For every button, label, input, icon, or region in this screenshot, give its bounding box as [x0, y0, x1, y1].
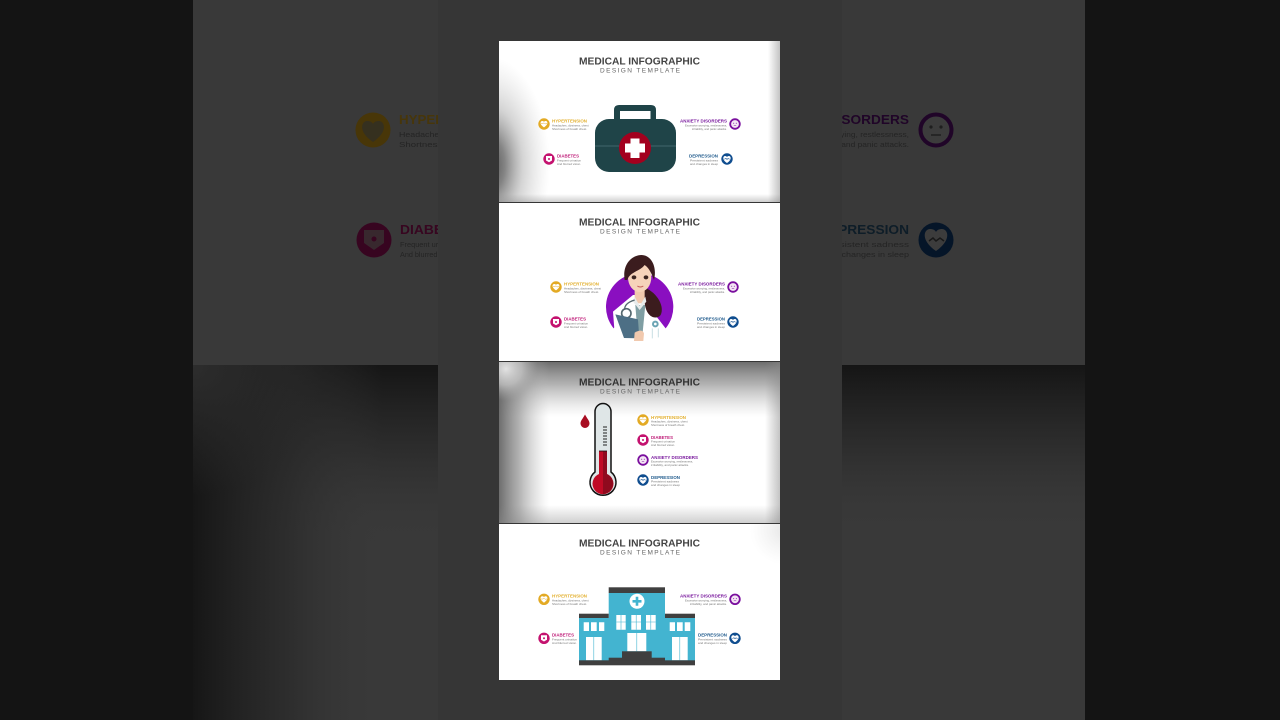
item: depression: and changes in sleep: [690, 162, 718, 166]
heading: [579, 56, 700, 74]
item: diabetes: [543, 153, 581, 166]
item: depression: [698, 633, 741, 645]
background ghost item: anxiety disorders: [765, 112, 952, 149]
item: hypertension: Headaches, dizziness, chest: [552, 123, 589, 127]
heading: [579, 538, 700, 556]
background ghost item: hypertension: [356, 112, 512, 149]
background ghost item: depression: DEPRESSION: [819, 222, 909, 237]
item: depression: and changes in sleep: [697, 325, 725, 329]
item: diabetes: Frequent urination: [564, 321, 588, 325]
item: hypertension: [637, 414, 688, 427]
item: hypertension: HYPERTENSION: [552, 118, 587, 123]
item: hypertension: Headaches, dizziness, chest: [564, 286, 601, 290]
item: hypertension: [550, 281, 601, 294]
item: anxiety disorders: Excessive worrying, restlessness,: [685, 599, 727, 603]
item: depression: DEPRESSION: [697, 316, 725, 321]
item: hypertension: Headaches, dizziness, chest: [651, 419, 688, 423]
item: hypertension: Shortness of breath chest.: [552, 602, 587, 606]
item: depression: DEPRESSION: [689, 153, 718, 158]
item: depression: Persistent sadness: [690, 158, 719, 162]
background ghost item: diabetes: And blurred vision.: [400, 250, 460, 259]
icon: thermometer: [590, 404, 616, 495]
item: depression: [637, 474, 680, 487]
item: anxiety disorders: [680, 594, 741, 606]
item: depression: DEPRESSION: [698, 633, 727, 638]
heading: DESIGN TEMPLATE: [600, 228, 681, 236]
item: anxiety disorders: ANXIETY DISORDERS: [678, 281, 725, 286]
heading: DESIGN TEMPLATE: [600, 550, 681, 556]
item: anxiety disorders: irritability, and panic attacks.: [651, 463, 689, 467]
item: hypertension: HYPERTENSION: [651, 415, 686, 420]
item: depression: and changes in sleep: [698, 641, 727, 645]
heading: MEDICAL INFOGRAPHIC: [579, 538, 700, 550]
background ghost item: anxiety disorders: irritability, and panic attacks.: [804, 140, 909, 149]
background ghost item: diabetes: [356, 222, 470, 259]
item: diabetes: [550, 316, 588, 329]
item: diabetes: DIABETES: [557, 153, 579, 158]
heading: MEDICAL INFOGRAPHIC: [579, 376, 700, 388]
background ghost item: diabetes: DIABETES: [400, 222, 470, 237]
background ghost item: depression: Persistent sadness: [824, 240, 909, 249]
item: diabetes: DIABETES: [564, 316, 586, 321]
heading: [579, 216, 700, 236]
item: anxiety disorders: irritability, and panic attacks.: [690, 290, 725, 294]
heading: MEDICAL INFOGRAPHIC: [579, 216, 700, 228]
item: diabetes: And blurred vision.: [651, 443, 675, 447]
background ghost item: hypertension: HYPERTENSION: [399, 112, 504, 127]
heading: DESIGN TEMPLATE: [600, 388, 681, 396]
heading: MEDICAL INFOGRAPHIC: [579, 56, 700, 68]
item: hypertension: Shortness of breath chest.: [564, 290, 599, 294]
background ghost item: anxiety disorders: ANXIETY DISORDERS: [765, 112, 909, 127]
item: anxiety disorders: ANXIETY DISORDERS: [680, 594, 727, 599]
item: diabetes: [637, 434, 675, 447]
item: diabetes: Frequent urination: [557, 158, 581, 162]
panel: doctor slide: [499, 203, 780, 361]
heading: DESIGN TEMPLATE: [600, 68, 681, 74]
item: anxiety disorders: Excessive worrying, restlessness,: [651, 459, 693, 463]
background ghost item: anxiety disorders: Excessive worrying, restlessness,: [784, 130, 909, 139]
item: depression: Persistent sadness: [698, 638, 728, 642]
item: depression: and changes in sleep: [651, 483, 680, 487]
illustration: hospital: [579, 587, 695, 665]
item: hypertension: Shortness of breath chest.: [552, 127, 587, 131]
icon: blood drop: [580, 414, 590, 428]
item: anxiety disorders: ANXIETY DISORDERS: [680, 118, 727, 123]
item: diabetes: And blurred vision.: [557, 162, 581, 166]
item: diabetes: DIABETES: [552, 633, 574, 638]
item: hypertension: HYPERTENSION: [552, 594, 587, 599]
item: anxiety disorders: ANXIETY DISORDERS: [651, 455, 698, 460]
item: hypertension: Shortness of breath chest.: [651, 423, 685, 427]
background ghost item: diabetes: Frequent urination: [400, 240, 460, 249]
item: anxiety disorders: [680, 118, 741, 131]
item: anxiety disorders: irritability, and panic attacks.: [690, 602, 727, 606]
background ghost item: depression: and changes in sleep: [824, 250, 909, 259]
icon: medical kit: [595, 105, 676, 172]
background panel: enlarged blurred slide: [193, 0, 1085, 720]
central column behind slides: [438, 0, 842, 720]
item: diabetes: DIABETES: [651, 435, 673, 440]
item: anxiety disorders: irritability, and panic attacks.: [692, 127, 727, 131]
background ghost item: hypertension: Headaches, dizziness, chest: [399, 130, 512, 139]
heading: [579, 376, 700, 396]
panel: hospital slide: [499, 524, 780, 680]
background ghost item: hypertension: Shortness of breath chest.: [399, 140, 511, 149]
item: diabetes: Frequent urination: [651, 439, 675, 443]
item: anxiety disorders: Excessive worrying, restlessness,: [683, 286, 725, 290]
item: diabetes: And blurred vision.: [552, 641, 577, 645]
background ghost item: depression: [819, 222, 954, 259]
item: diabetes: And blurred vision.: [564, 325, 588, 329]
item: diabetes: Frequent urination: [552, 638, 577, 642]
item: hypertension: Headaches, dizziness, chest: [552, 599, 589, 603]
item: hypertension: [538, 594, 589, 606]
panel: thermometer slide: [499, 362, 780, 523]
item: diabetes: [538, 633, 577, 645]
item: anxiety disorders: [637, 454, 698, 467]
item: depression: Persistent sadness: [697, 321, 726, 325]
item: anxiety disorders: Excessive worrying, restlessness,: [685, 123, 727, 127]
item: depression: [689, 153, 733, 166]
panel: medical kit slide: [499, 41, 780, 202]
item: hypertension: [538, 118, 589, 131]
item: depression: DEPRESSION: [651, 475, 680, 480]
item: depression: Persistent sadness: [651, 479, 680, 483]
illustration: doctor: [606, 255, 673, 342]
item: anxiety disorders: [678, 281, 739, 294]
item: hypertension: HYPERTENSION: [564, 281, 599, 286]
item: depression: [697, 316, 739, 329]
